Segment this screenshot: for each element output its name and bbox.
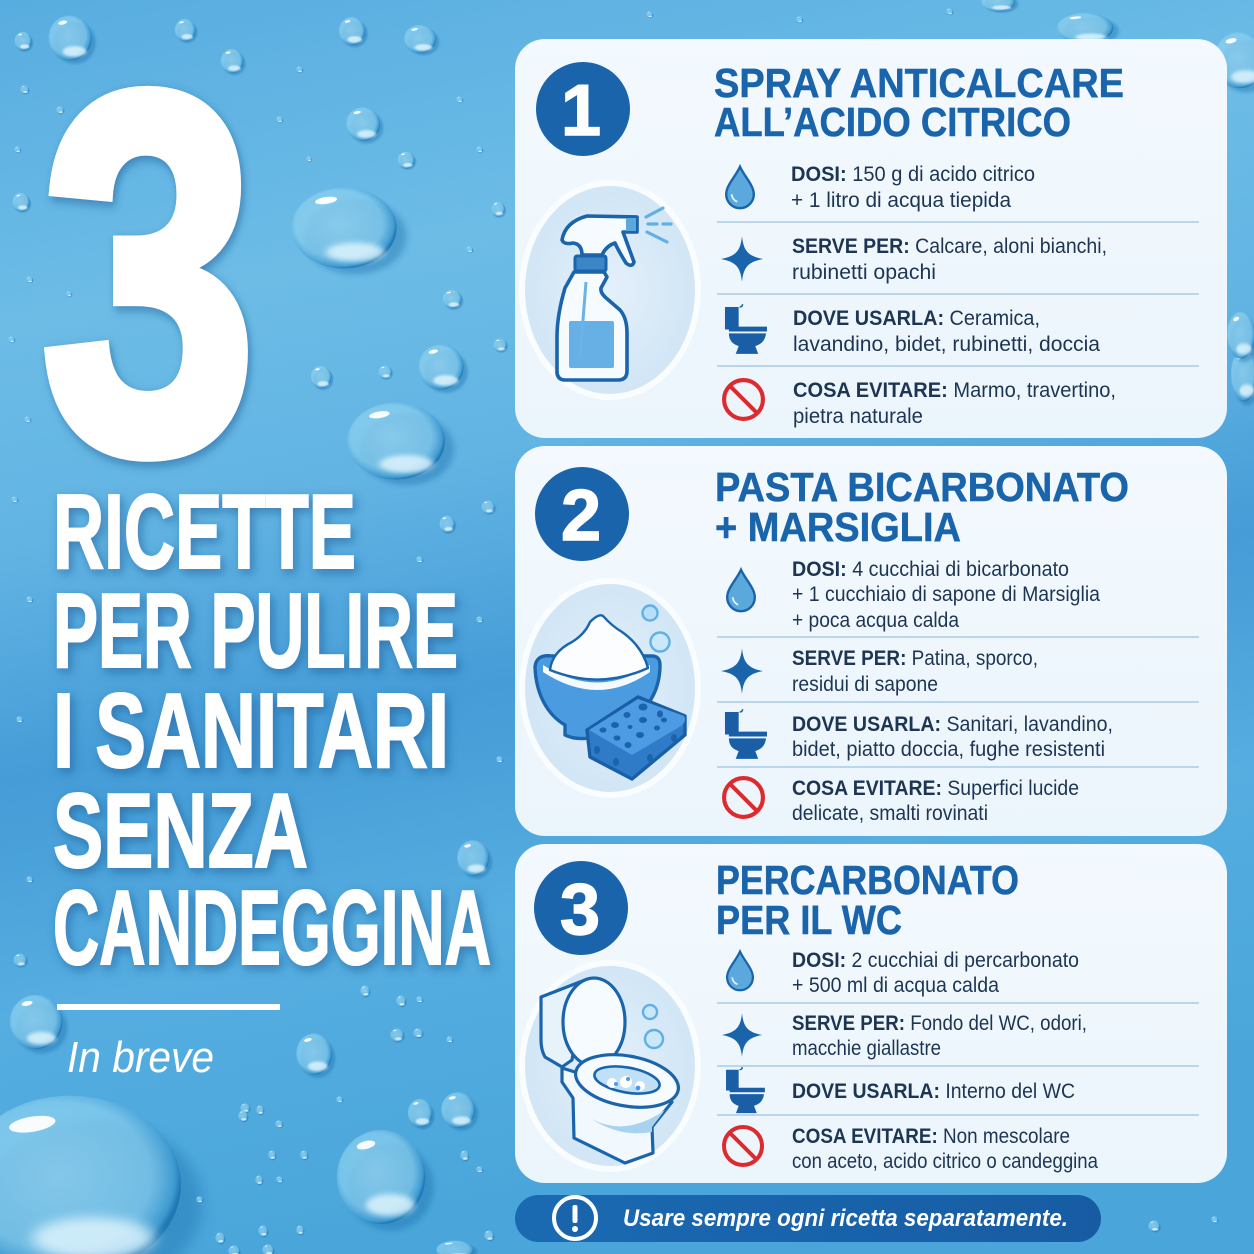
callout: warning: Usare sempre ogni ricetta separatamente. bbox=[623, 1205, 1068, 1232]
panel: recipe 1 bbox=[515, 39, 1227, 438]
row: cosa evitare: pietra naturale bbox=[793, 405, 923, 428]
recipe 2 heading: PASTA BICARBONATO bbox=[715, 464, 1129, 510]
row: cosa evitare: COSA EVITARE: Non mescolare bbox=[792, 1125, 1070, 1148]
subtitle: In breve bbox=[67, 1033, 214, 1082]
row: dosi: DOSI: 2 cucchiai di percarbonato bbox=[792, 949, 1079, 972]
row: serve per bbox=[721, 235, 1107, 284]
row: cosa evitare: con aceto, acido citrico o candeggina bbox=[792, 1150, 1098, 1173]
main title: RICETTE bbox=[53, 473, 356, 591]
row: cosa evitare bbox=[724, 379, 1116, 428]
recipe 3 heading: PERCARBONATO bbox=[716, 857, 1019, 903]
title divider bbox=[57, 1004, 280, 1010]
main title: PER PULIRE bbox=[53, 572, 458, 690]
row: cosa evitare: COSA EVITARE: Superfici lucide bbox=[792, 777, 1079, 800]
row: cosa evitare: COSA EVITARE: Marmo, travertino, bbox=[793, 379, 1116, 402]
row: serve per: macchie giallastre bbox=[792, 1037, 941, 1060]
callout: warning bbox=[515, 1195, 1101, 1242]
row: serve per: rubinetti opachi bbox=[792, 261, 936, 284]
row: dosi: + 1 litro di acqua tiepida bbox=[791, 189, 1011, 212]
number badge 1 bbox=[536, 62, 630, 156]
illustration: toilet bbox=[522, 963, 698, 1169]
row: serve per bbox=[721, 647, 1038, 696]
main title: I SANITARI bbox=[53, 672, 449, 790]
number badge 1: 1 bbox=[561, 71, 601, 151]
number badge 3 bbox=[534, 861, 628, 955]
row: dove usarla: DOVE USARLA: Interno del WC bbox=[792, 1080, 1075, 1103]
row: serve per bbox=[722, 1012, 1087, 1060]
row: serve per: SERVE PER: Fondo del WC, odori, bbox=[792, 1012, 1087, 1035]
panel: recipe 2 bbox=[515, 446, 1227, 836]
recipe 1 heading bbox=[714, 60, 1124, 145]
row: dosi: DOSI: 4 cucchiai di bicarbonato bbox=[792, 558, 1069, 581]
row: dosi bbox=[727, 949, 1079, 997]
row: serve per: SERVE PER: Patina, sporco, bbox=[792, 647, 1038, 670]
row: serve per: SERVE PER: Calcare, aloni bianchi, bbox=[792, 235, 1107, 258]
recipe 3 heading: PER IL WC bbox=[716, 897, 902, 943]
row: dove usarla: DOVE USARLA: Sanitari, lavandino, bbox=[792, 713, 1113, 736]
row: dove usarla bbox=[725, 304, 1100, 356]
row: cosa evitare: delicate, smalti rovinati bbox=[792, 802, 988, 825]
row: dove usarla: lavandino, bidet, rubinetti, doccia bbox=[793, 333, 1100, 356]
row: dosi bbox=[726, 163, 1035, 212]
row: cosa evitare bbox=[724, 777, 1079, 825]
illustration: bowl and sponge bbox=[522, 581, 698, 795]
row: dosi: DOSI: 150 g di acido citrico bbox=[791, 163, 1035, 186]
main title: CANDEGGINA bbox=[53, 869, 491, 987]
row: dove usarla bbox=[725, 709, 1113, 761]
number badge 2: 2 bbox=[561, 476, 601, 556]
recipe 2 heading: + MARSIGLIA bbox=[715, 504, 961, 550]
row: dove usarla bbox=[726, 1067, 1075, 1113]
number badge 2 bbox=[535, 467, 629, 561]
recipe 1 heading: ALL’ACIDO CITRICO bbox=[714, 99, 1071, 145]
big number 3: 3 bbox=[41, 0, 257, 557]
row: dove usarla: bidet, piatto doccia, fughe resistenti bbox=[792, 738, 1105, 761]
row: serve per: residui di sapone bbox=[792, 673, 938, 696]
row: dove usarla: DOVE USARLA: Ceramica, bbox=[793, 307, 1040, 330]
row: dosi: + poca acqua calda bbox=[792, 609, 959, 632]
recipe 3 heading bbox=[716, 857, 1019, 943]
row: dosi: + 1 cucchiaio di sapone di Marsiglia bbox=[792, 583, 1100, 606]
row: cosa evitare bbox=[724, 1125, 1098, 1173]
icon: exclamation bbox=[554, 1197, 596, 1239]
recipe 2 heading bbox=[715, 464, 1129, 550]
number badge 3: 3 bbox=[560, 870, 600, 950]
main title: SENZA bbox=[53, 772, 308, 890]
row: dosi bbox=[727, 558, 1100, 632]
illustration: spray bottle bbox=[522, 183, 698, 397]
row: dosi: + 500 ml di acqua calda bbox=[792, 974, 999, 997]
main title bbox=[53, 473, 491, 987]
panel: recipe 3 bbox=[515, 844, 1227, 1183]
recipe 1 heading: SPRAY ANTICALCARE bbox=[714, 60, 1124, 106]
